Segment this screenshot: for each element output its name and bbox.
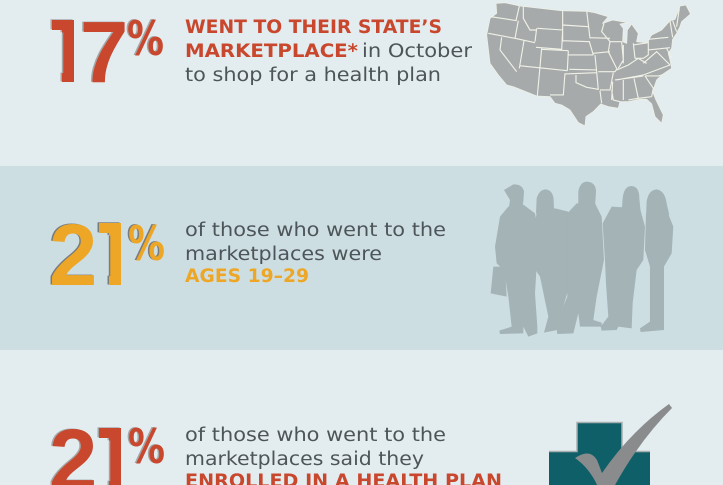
statistic: 17 percent: 1 bbox=[42, 3, 90, 100]
statistic: 21 percent ages 19 to 29: 1 bbox=[90, 207, 138, 304]
statistic: 21 percent enrolled: % bbox=[126, 419, 164, 474]
icon: United States map bbox=[487, 3, 691, 126]
text: went to their state's marketplace: MARKETPLACE* bbox=[185, 41, 358, 62]
text: of those who went, enrolled bbox=[185, 425, 502, 485]
text: of those who went, ages 19-29 bbox=[185, 220, 446, 287]
text: of those who went, ages 19-29: AGES 19–29 bbox=[185, 266, 309, 287]
text: went to their state's marketplace: in October bbox=[362, 41, 472, 62]
cross bbox=[549, 423, 650, 485]
statistic: 17 percent: % bbox=[127, 12, 164, 67]
statistic: 21 percent enrolled bbox=[50, 427, 164, 485]
panel: enrolled in a plan bbox=[48, 404, 672, 485]
statistic: 17 percent bbox=[50, 19, 163, 82]
panel: marketplace visits bbox=[42, 3, 691, 126]
text: went to their state's marketplace: WENT TO THEIR STATE’S bbox=[185, 17, 442, 38]
fourth person bbox=[601, 186, 645, 331]
statistic: 21 percent ages 19 to 29: 2 bbox=[49, 207, 97, 304]
person with cap and bag bbox=[491, 184, 539, 337]
statistic: 21 percent ages 19 to 29: % bbox=[128, 217, 165, 272]
text: of those who went, ages 19-29: of those who went to the bbox=[185, 220, 446, 241]
fifth person bbox=[640, 189, 673, 332]
check mark bbox=[575, 404, 672, 485]
statistic: 17 percent: % bbox=[126, 11, 162, 66]
panel: young adults bbox=[48, 182, 673, 337]
text: went to their state's marketplace: to shop for a health plan bbox=[185, 65, 441, 86]
third person bbox=[556, 182, 604, 334]
statistic: 21 percent ages 19 to 29: 1 bbox=[88, 206, 137, 303]
text: of those who went, ages 19-29: marketplaces were bbox=[185, 244, 382, 265]
icon: medical cross with check mark bbox=[549, 404, 672, 485]
statistic: 17 percent: 7 bbox=[80, 4, 128, 101]
statistic: 17 percent: 7 bbox=[78, 3, 127, 100]
statistic: 21 percent ages 19 to 29: % bbox=[126, 216, 164, 271]
icon: group of young people silhouette bbox=[491, 182, 673, 337]
panel: middle band background bbox=[0, 166, 723, 350]
statistic: 17 percent: 1 bbox=[43, 4, 91, 101]
statistic: 21 percent ages 19 to 29: 2 bbox=[48, 206, 96, 303]
text: went to their state's marketplace bbox=[185, 17, 472, 86]
second person bbox=[533, 189, 571, 333]
statistic: 21 percent ages 19 to 29 bbox=[50, 222, 164, 285]
statistic: 21 percent enrolled: % bbox=[128, 420, 165, 475]
text: of those who went, enrolled: of those who went to the bbox=[185, 425, 446, 446]
text: of those who went, enrolled: marketplaces said they bbox=[185, 449, 424, 470]
